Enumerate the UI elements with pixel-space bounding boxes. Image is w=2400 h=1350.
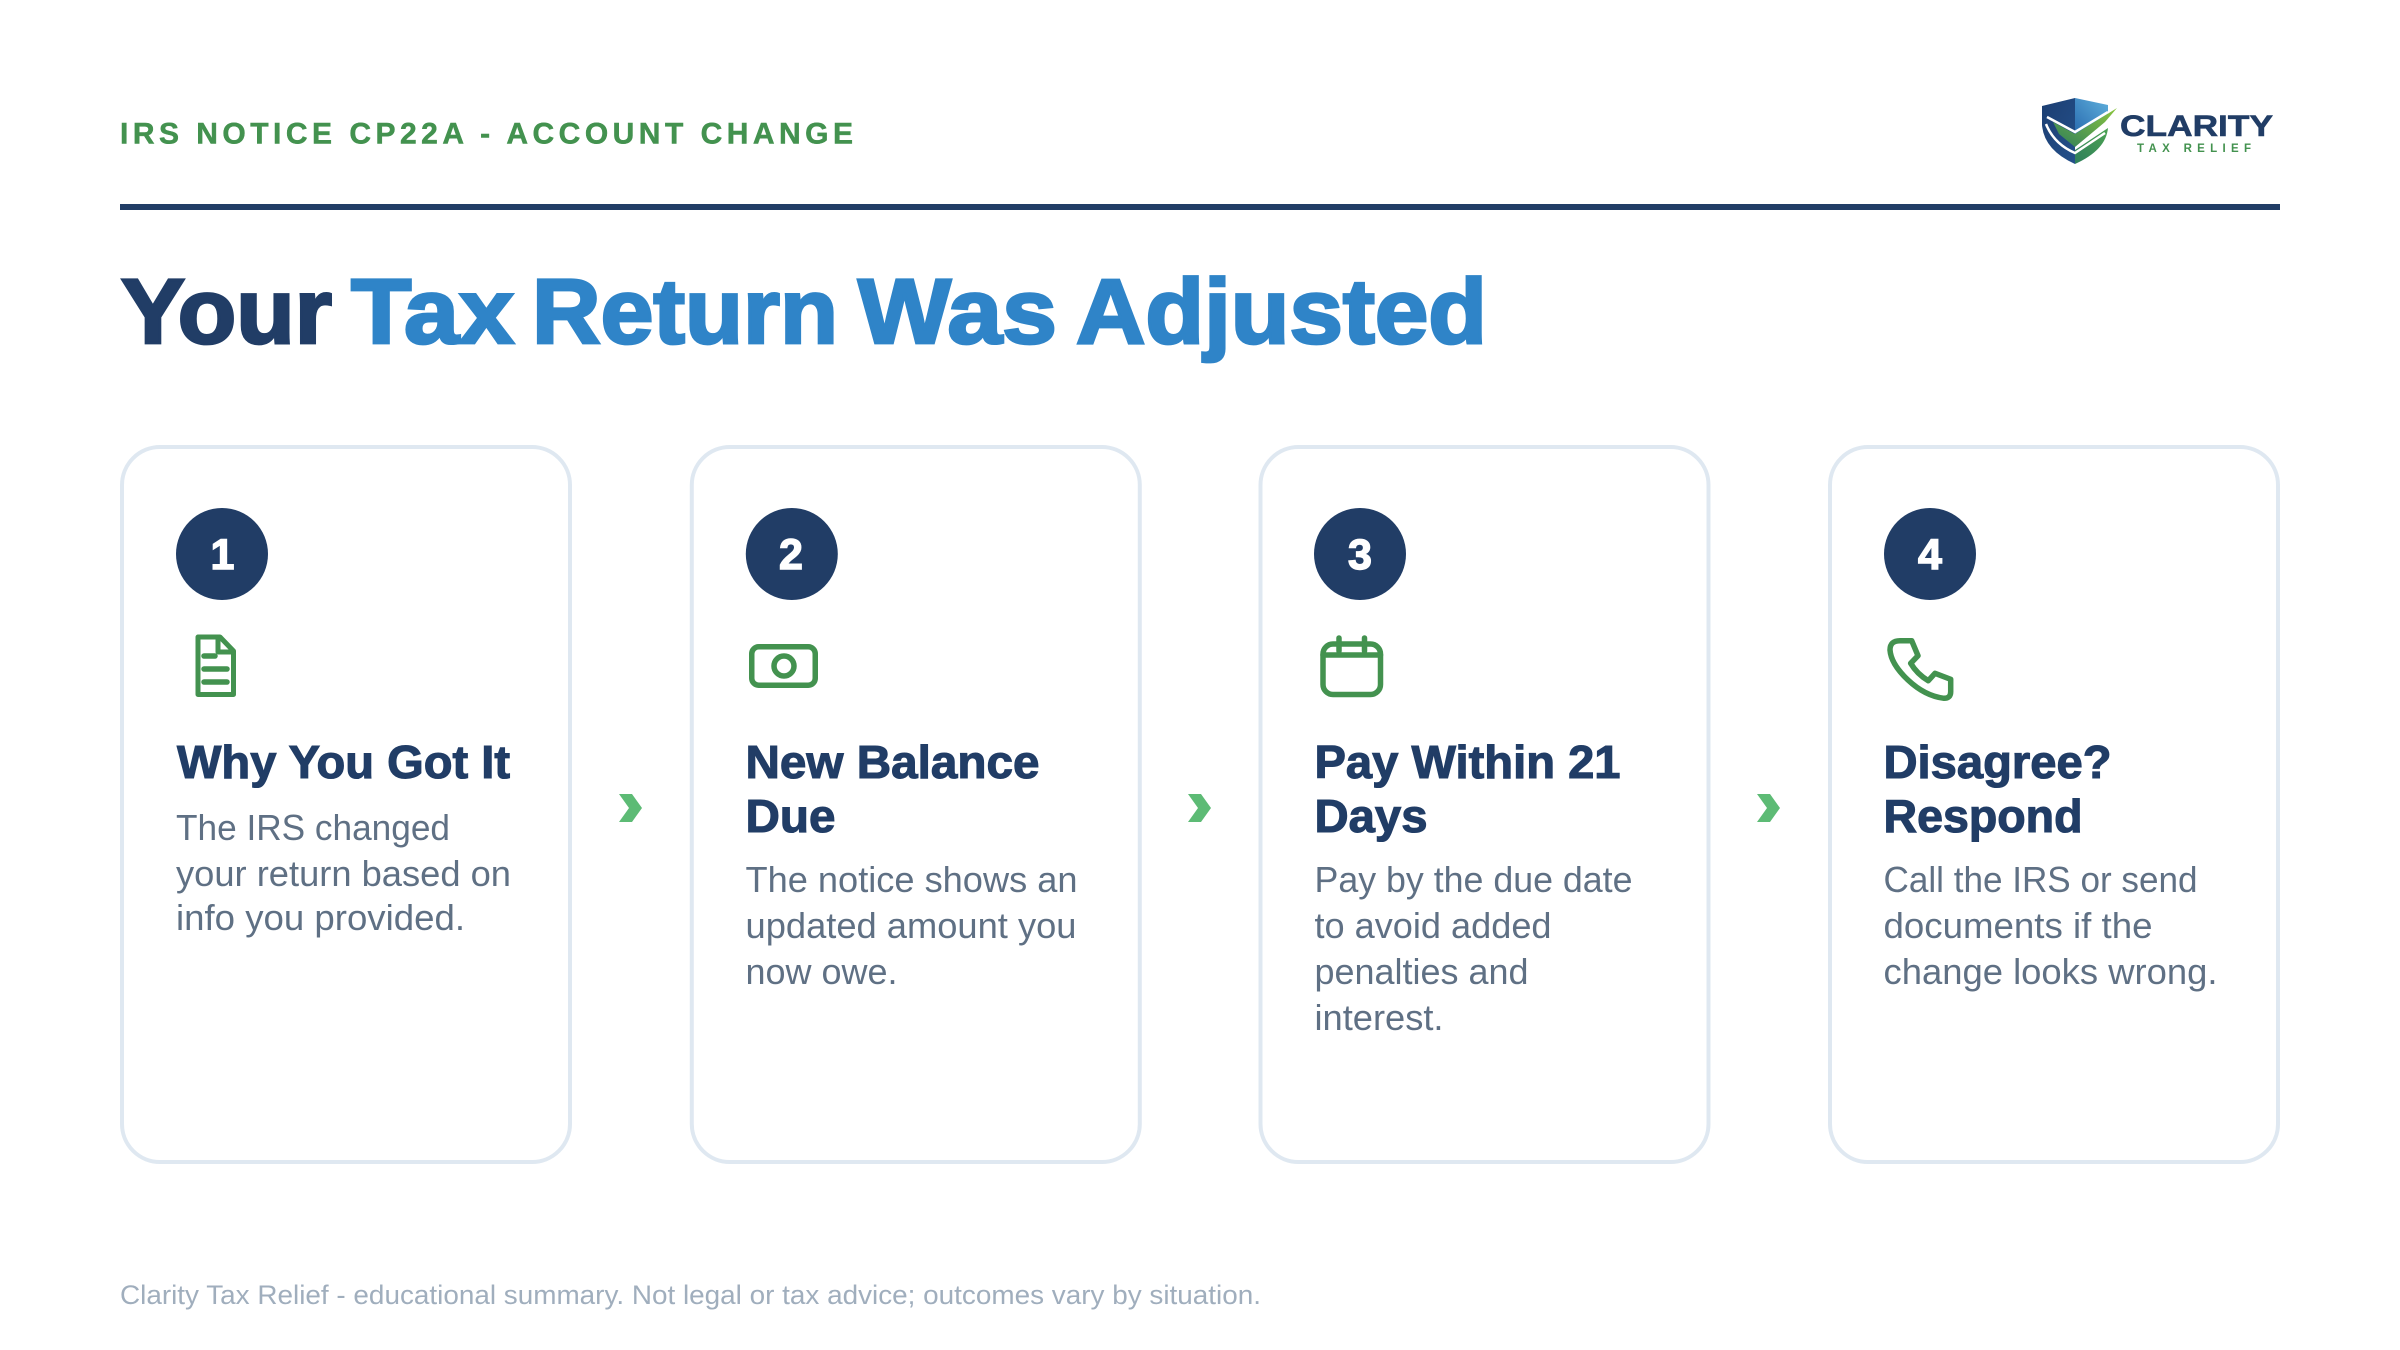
panel: step 3 pay within 21 days [1260,447,1708,1162]
icon: calendar [1323,638,1380,694]
body text: your return based on [176,853,511,894]
logo tagline: TAX RELIEF [2137,143,2251,155]
body text [746,859,1078,992]
body text: The notice shows an [746,859,1078,900]
heading [1314,736,1620,842]
body text: now owe. [746,951,898,992]
body text: change looks wrong. [1884,951,2218,992]
heading: Disagree? [1884,736,2112,788]
title: Tax [351,261,514,363]
body text [176,807,511,938]
heading: Respond [1884,790,2082,842]
eyebrow label: IRS NOTICE CP22A - ACCOUNT CHANGE [120,118,853,150]
panel: step 1 why you got it [122,447,570,1162]
step number 2 [746,508,838,600]
heading: Due [746,790,836,842]
heading: Pay Within 21 [1314,736,1620,788]
body text: info you provided. [176,897,465,938]
heading: Why You Got It [177,736,510,788]
body text [1884,859,2218,992]
step number 3: 3 [1348,531,1372,579]
body text: to avoid added [1314,905,1552,946]
footer disclaimer: Clarity Tax Relief - educational summary. Not legal or tax advice; outcomes vary by situation. [120,1280,1261,1310]
body text: The IRS changed [176,807,450,848]
body text: updated amount you [746,905,1076,946]
title: Adjusted [1076,261,1487,363]
step number 4 [1884,508,1976,600]
body text: Call the IRS or send [1884,859,2198,900]
panel: step 2 new balance due [692,447,1140,1162]
title: Your [121,261,332,363]
step number 1: 1 [211,531,234,579]
title: Return [532,261,838,363]
step number 4: 4 [1918,531,1942,579]
icon: banknote [752,647,815,685]
arrow 3 [1757,794,1780,822]
title: Was [858,261,1057,363]
arrow 1 [619,794,642,822]
step number 2: 2 [779,531,803,579]
body text: interest. [1314,997,1444,1038]
step number 3 [1314,508,1406,600]
heading [746,736,1040,842]
heading [1884,736,2112,842]
panel: step 4 disagree respond [1830,447,2278,1162]
logo: Clarity Tax Relief [2042,98,2273,164]
arrow 2 [1188,794,1211,822]
logo wordmark: CLARITY [2120,110,2273,143]
heading: Days [1314,790,1428,842]
icon: document [198,637,234,694]
logo shield [2042,98,2117,164]
body text: documents if the [1884,905,2152,946]
body text: Pay by the due date [1314,859,1632,900]
icon: phone [1890,641,1951,698]
body text: penalties and [1314,951,1528,992]
title [121,261,1487,363]
step number 1 [176,508,268,600]
body text [1314,859,1632,1038]
header rule [120,204,2280,210]
heading: New Balance [746,736,1040,788]
